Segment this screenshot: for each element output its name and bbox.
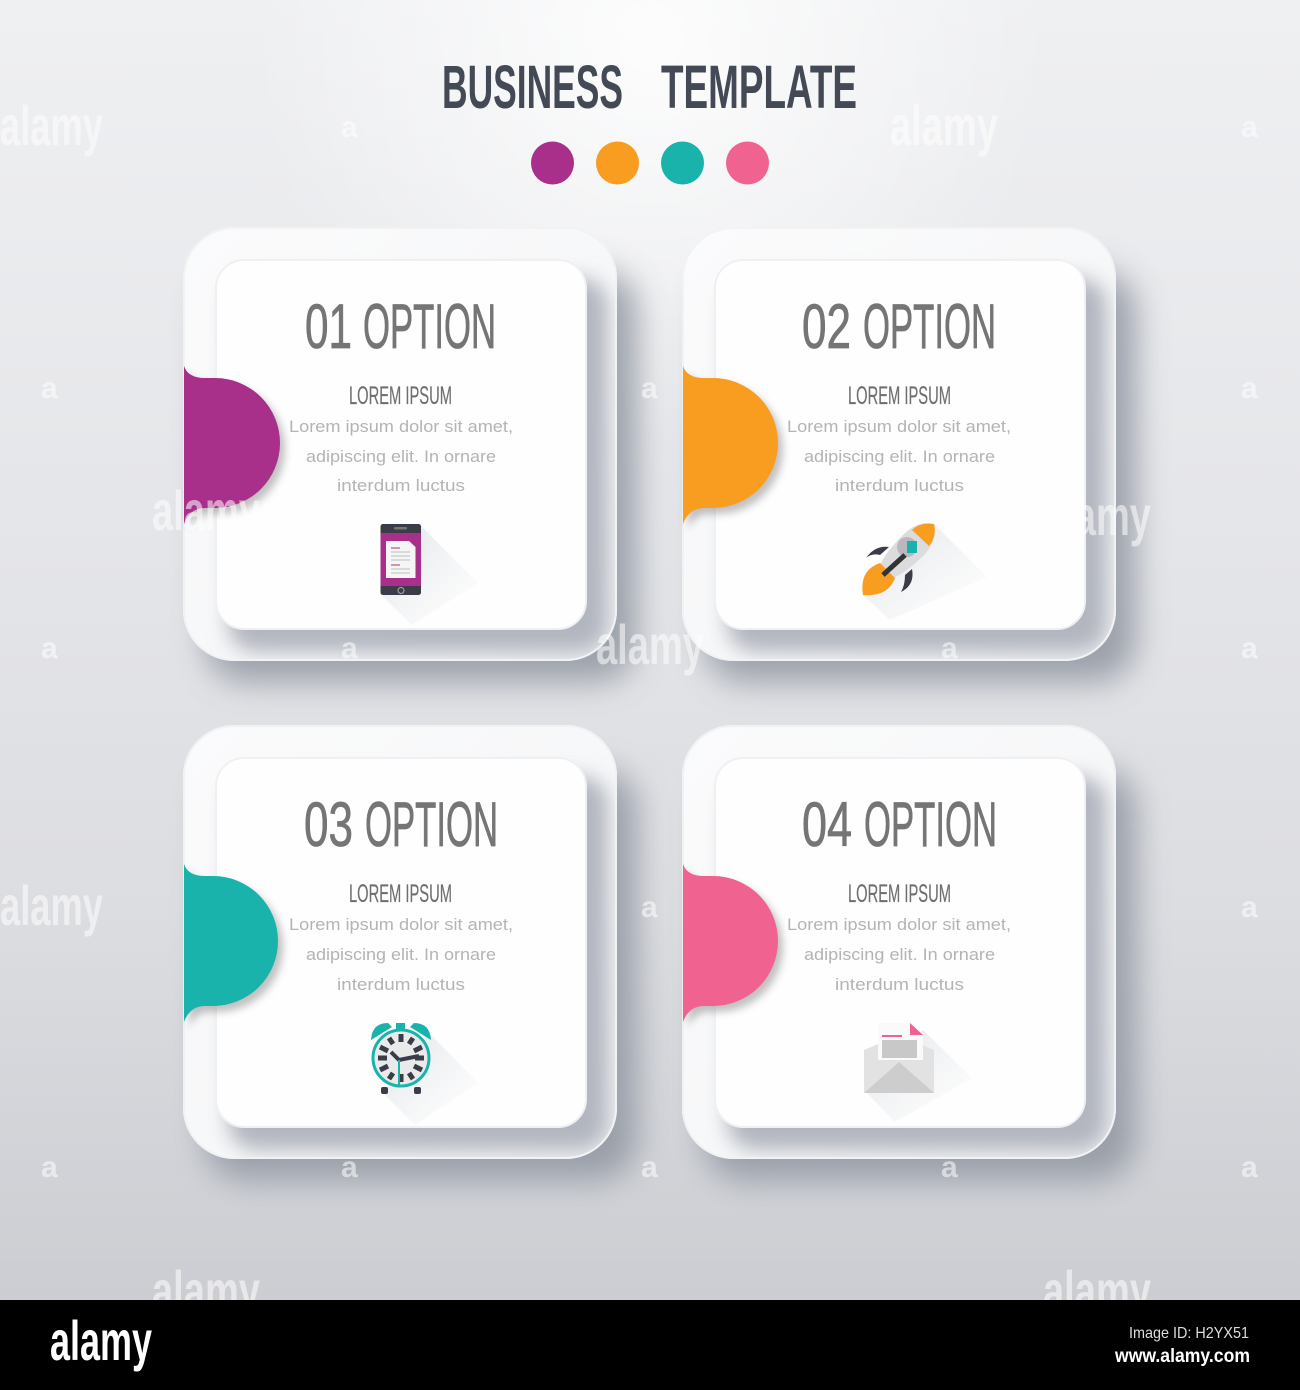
watermarks: a bbox=[341, 1151, 358, 1184]
watermarks: alamy bbox=[1043, 484, 1151, 547]
body text: adipiscing elit. In ornare bbox=[306, 448, 496, 466]
subheading: LOREM IPSUM bbox=[848, 880, 951, 908]
body text bbox=[289, 418, 513, 495]
tab: pink bbox=[683, 864, 783, 1028]
body text: adipiscing elit. In ornare bbox=[804, 448, 995, 466]
watermarks: alamy bbox=[152, 479, 260, 542]
tab: purple bbox=[184, 366, 285, 530]
body text: Lorem ipsum dolor sit amet, bbox=[289, 916, 513, 934]
panel: option 02 bbox=[683, 228, 1136, 682]
watermarks: a bbox=[341, 111, 358, 144]
heading: 04 option: 04 bbox=[802, 790, 852, 860]
body text: interdum luctus bbox=[337, 976, 465, 994]
body text: adipiscing elit. In ornare bbox=[306, 946, 496, 964]
body text bbox=[787, 916, 1011, 994]
body text bbox=[289, 916, 513, 994]
body text: adipiscing elit. In ornare bbox=[804, 946, 995, 964]
footer url: www.alamy.com bbox=[1114, 1346, 1250, 1367]
watermarks: a bbox=[41, 1151, 58, 1184]
tab: teal bbox=[184, 864, 283, 1028]
watermarks: alamy bbox=[152, 1259, 260, 1322]
tab: orange bbox=[683, 366, 783, 530]
footer logo: alamy bbox=[50, 1309, 152, 1372]
watermarks: a bbox=[1241, 111, 1258, 144]
watermarks: a bbox=[641, 1151, 658, 1184]
heading: 01 option: OPTION bbox=[363, 292, 496, 362]
body text bbox=[787, 418, 1011, 495]
heading: 03 option bbox=[304, 790, 498, 860]
subheading: LOREM IPSUM bbox=[848, 382, 951, 410]
heading: 02 option: OPTION bbox=[863, 292, 996, 362]
watermarks: a bbox=[41, 632, 58, 665]
heading: 02 option: 02 bbox=[802, 292, 851, 362]
title: BUSINESS bbox=[442, 53, 623, 121]
body text: Lorem ipsum dolor sit amet, bbox=[787, 916, 1011, 934]
title: TEMPLATE bbox=[661, 53, 857, 121]
body text: Lorem ipsum dolor sit amet, bbox=[787, 418, 1011, 436]
watermarks: a bbox=[641, 372, 658, 405]
watermarks: a bbox=[1241, 891, 1258, 924]
colour dots bbox=[531, 142, 769, 184]
watermarks: a bbox=[941, 1151, 958, 1184]
watermarks: a bbox=[341, 632, 358, 665]
image id: Image ID: H2YX51 bbox=[1129, 1325, 1249, 1342]
watermarks: a bbox=[641, 891, 658, 924]
heading: 01 option: 01 bbox=[305, 292, 352, 362]
watermarks: alamy bbox=[0, 94, 103, 157]
watermarks: alamy bbox=[596, 613, 704, 676]
footer bar bbox=[0, 1300, 1300, 1390]
watermarks: a bbox=[1241, 1151, 1258, 1184]
heading: 04 option bbox=[802, 790, 997, 860]
subheading: LOREM IPSUM bbox=[349, 880, 452, 908]
heading: 03 option: OPTION bbox=[365, 790, 498, 860]
heading: 01 option bbox=[305, 292, 496, 362]
watermarks: alamy bbox=[890, 94, 998, 157]
body text: interdum luctus bbox=[337, 477, 465, 495]
panel: option 04 bbox=[683, 726, 1136, 1180]
icon: rocket bbox=[862, 523, 987, 620]
watermarks: a bbox=[1241, 372, 1258, 405]
panel: option 03 bbox=[184, 726, 637, 1180]
watermarks: a bbox=[941, 632, 958, 665]
heading: 04 option: OPTION bbox=[864, 790, 997, 860]
icon: phone bbox=[380, 524, 478, 625]
heading: 02 option bbox=[802, 292, 996, 362]
watermarks: a bbox=[1241, 632, 1258, 665]
body text: Lorem ipsum dolor sit amet, bbox=[289, 418, 513, 436]
watermarks: a bbox=[41, 372, 58, 405]
body text: interdum luctus bbox=[835, 477, 964, 495]
watermarks: alamy bbox=[0, 874, 103, 937]
heading: 03 option: 03 bbox=[304, 790, 353, 860]
icon: alarm clock bbox=[371, 1023, 478, 1125]
watermarks: alamy bbox=[1043, 1259, 1151, 1322]
body text: interdum luctus bbox=[835, 976, 964, 994]
panel: option 01 bbox=[184, 228, 637, 682]
subheading: LOREM IPSUM bbox=[349, 382, 452, 410]
icon: envelope bbox=[864, 1023, 972, 1122]
